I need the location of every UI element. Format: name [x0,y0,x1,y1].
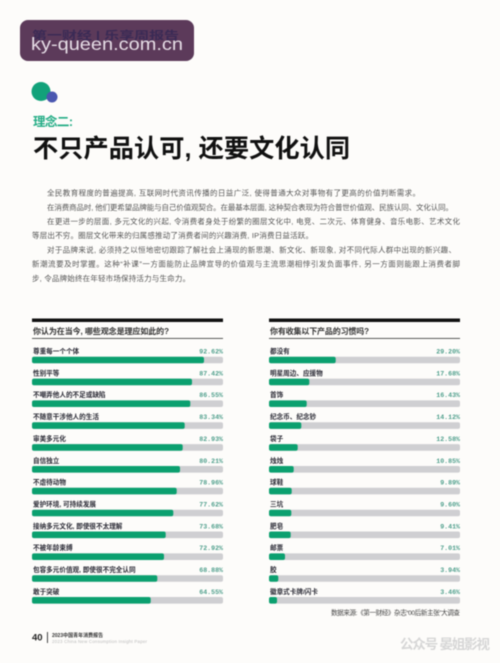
row: 三坑 [269,500,460,516]
title: 不只产品认可, 还要文化认同 [33,135,350,163]
row: 接纳多元文化 [32,521,223,538]
row: 尊重每一个个体: 尊重每一个个体 [33,346,80,356]
row: 三坑: 三坑 [270,500,284,508]
row: 性别平等 [32,368,223,385]
row: 徽章式卡牌/闪卡: 徽章式卡牌/闪卡 [270,587,318,596]
row: 烛烛: 10.85% [436,458,460,465]
row: 不嘲弄他人的不足或缺陷: 86.55% [199,392,223,399]
row: 胶 [269,565,460,582]
row: 包容多元价值观: 包容多元价值观, 即使很不完全认同 [33,565,136,574]
right chart heading: 你有收集以下产品的习惯吗? [270,326,369,336]
row: 明星周边、应援物: 17.68% [436,370,460,377]
row: 明星周边、应援物: 明星周边、应援物 [270,368,323,377]
watermark badge: ky-queen.com.cn [31,34,183,54]
row: 首饰: 16.43% [436,392,460,399]
row: 自信独立 [32,456,223,473]
row: 徽章式卡牌/闪卡: 3.46% [440,589,460,596]
row: 球鞋: 9.89% [440,480,460,487]
row: 三坑: 9.60% [440,502,460,508]
row: 都没有: 都没有 [270,346,290,356]
row: 纪念币、纪念钞 [269,412,460,429]
row: 包容多元价值观: 68.88% [199,567,223,574]
row: 不嘲弄他人的不足或缺陷: 不嘲弄他人的不足或缺陷 [33,390,106,399]
body text: 等层出不穷。圈层文化带来的归属感推动了消费者间的兴趣消费, IP消费日益活跃。 [32,230,313,240]
row: 邮票 [269,543,460,560]
row: 肥皂 [269,521,460,538]
row: 审美多元化: 82.93% [199,436,223,443]
row: 肥皂: 肥皂 [270,521,284,530]
row: 性别平等: 性别平等 [33,368,60,377]
row: 都没有 [269,346,460,363]
row: 包容多元价值观 [32,565,223,582]
left chart heading: 你认为在当今, 哪些观念是理应如此的? [33,326,169,336]
row: 不随意干涉他人的生活 [32,412,223,429]
row: 性别平等: 87.42% [199,370,223,377]
body text: 步, 令品牌始终在年轻市场保持活力与生命力。 [32,273,190,283]
row: 袋子: 12.58% [436,436,460,443]
panel: left bar chart [32,318,223,604]
watermark: account name: 公众号 晏姐影视 [400,636,490,652]
panel: right bar chart [269,318,460,604]
row: 球鞋 [269,478,460,494]
row: 敢于突破 [32,587,223,604]
body text: 新潮流要及时掌握。这种“补课”一方面能防止品牌宣导的价值观与主流思潮相悖引发负面事件, 另一方面则能跟上消费者脚 [32,259,460,269]
footer: page number and report name: 2023 China New Consumption Insight Paper [52,639,148,644]
watermark badge: 第一财经 | 乐享周报告 [32,28,179,42]
row: 邮票: 7.01% [440,545,460,552]
row: 袋子: 袋子 [270,434,284,443]
row: 肥皂: 9.41% [440,523,460,530]
footer: page number and report name [32,632,148,644]
row: 不嘲弄他人的不足或缺陷 [32,390,223,407]
row: 接纳多元文化: 73.68% [199,523,223,530]
row: 爱护环境，可持续发展: 爱护环境, 可持续发展 [33,500,96,508]
body text: 在更进一步的层面, 多元文化的兴起, 令消费者身处于纷繁的圈层文化中, 电竞、二次元、体育健身、音乐电影、艺术文化 [47,216,460,226]
body text: 全民教育程度的普遍提高, 互联网时代资讯传播的日益广泛, 使得普通大众对事物有了更高的价值判断需求。 [47,188,420,198]
row: 纪念币、纪念钞: 14.12% [436,414,460,421]
body text: 对于品牌来说, 必须持之以恒地密切跟踪了解社会上涌现的新思潮、新文化、新现象, 对不同代际人群中出现的新兴趣、 [47,244,456,254]
section label: 理念二: [33,114,73,129]
row: 爱护环境，可持续发展 [32,500,223,516]
row: 尊重每一个个体: 92.62% [199,348,223,356]
row: 不虐待动物 [32,478,223,494]
row: 胶: 3.94% [440,567,460,574]
row: 不虐待动物: 不虐待动物 [33,478,66,487]
row: 不随意干涉他人的生活: 不随意干涉他人的生活 [33,412,99,421]
row: 袋子 [269,434,460,451]
row: 徽章式卡牌/闪卡 [269,587,460,604]
row: 邮票: 邮票 [270,543,284,552]
row: 烛烛 [269,456,460,473]
row: 审美多元化: 审美多元化 [33,434,66,443]
row: 首饰 [269,390,460,407]
row: 首饰: 首饰 [270,390,284,399]
watermark badge [20,20,194,61]
row: 不被年龄束缚 [32,543,223,560]
body text [32,188,460,283]
body text: 在消费商品时, 他们更希望品牌能与自己价值观契合。在最基本层面, 这种契合表现为符合普世价值观、民族认同、文化认同。 [47,202,453,212]
row: 纪念币、纪念钞: 纪念币、纪念钞 [270,412,317,421]
row: 不被年龄束缚: 不被年龄束缚 [33,543,73,552]
row: 不虐待动物: 78.96% [199,480,223,487]
row: 敢于突破: 敢于突破 [33,587,60,596]
row: 明星周边、应援物 [269,368,460,385]
data source note: 数据来源:《第一财经》杂志“00后新主张”大调查 [331,608,460,617]
row: 自信独立: 自信独立 [33,456,60,465]
row: 都没有: 29.20% [436,348,460,356]
row: 胶: 胶 [270,565,277,574]
footer: page number and report name: 40 [32,632,43,644]
row: 审美多元化 [32,434,223,451]
footer: page number and report name: 2023中国青年消费报告 [52,632,103,639]
icon: overlapping circles [32,82,58,102]
row: 不随意干涉他人的生活: 83.34% [199,414,223,421]
row: 烛烛: 烛烛 [270,456,284,465]
row: 尊重每一个个体 [32,346,223,363]
row: 接纳多元文化: 接纳多元文化, 即使很不太理解 [33,521,123,530]
row: 敢于突破: 64.55% [199,589,223,596]
row: 爱护环境，可持续发展: 77.62% [199,502,223,508]
row: 不被年龄束缚: 72.92% [199,545,223,552]
row: 自信独立: 80.21% [199,458,223,465]
row: 球鞋: 球鞋 [270,478,284,487]
